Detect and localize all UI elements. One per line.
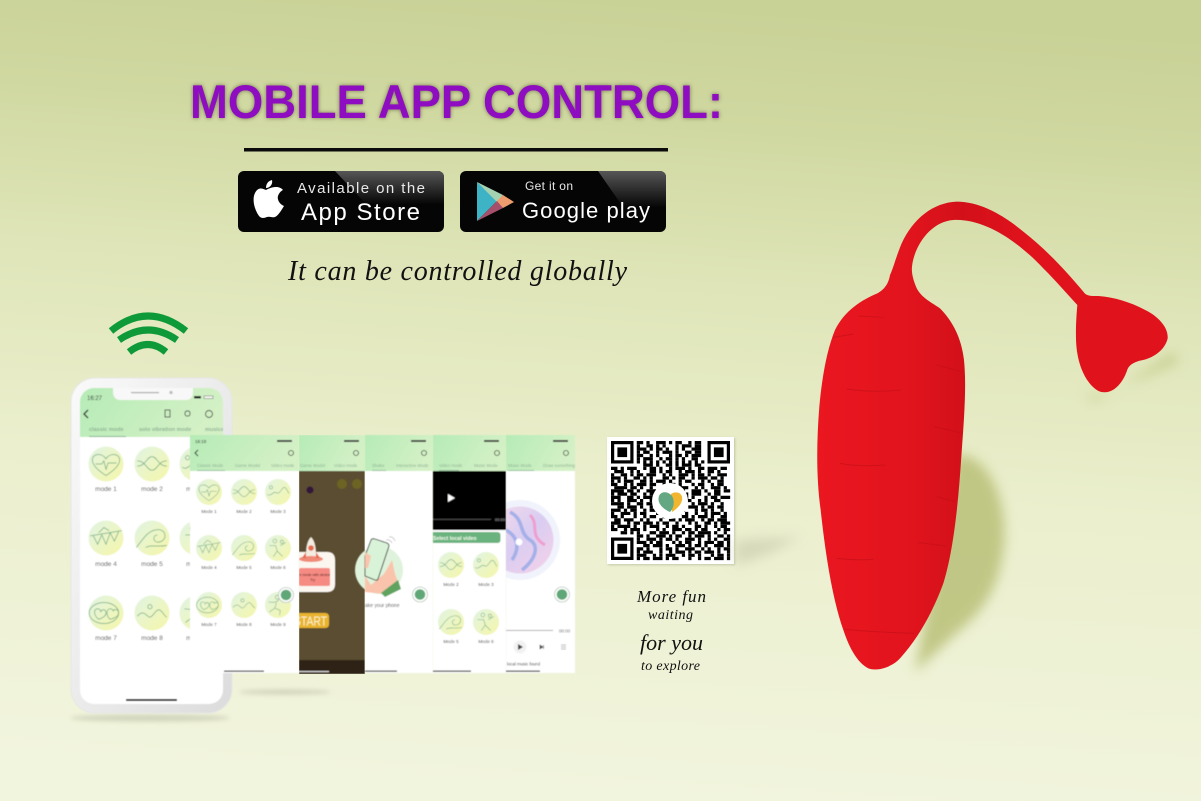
- video player: 00:00: [495, 517, 506, 522]
- title: MOBILE APP CONTROL:: [190, 75, 723, 128]
- screenshot mode grid: Mode 1: [201, 509, 217, 514]
- record button: [412, 587, 428, 602]
- phone tab: classic mode: classic mode: [89, 427, 124, 433]
- video mode grid: Mode 5: [443, 639, 459, 644]
- screenshot: shake mode: Interactive Mode: [396, 463, 429, 468]
- floor shadow beside QR: [736, 537, 800, 566]
- product shadows: [915, 352, 1180, 672]
- home bar: [433, 670, 471, 672]
- phone mode grid: mode 5: [141, 561, 163, 568]
- video tabs: Video mode: [439, 463, 463, 468]
- home bar: [224, 670, 264, 672]
- screenshot mode grid: Mode 9: [270, 622, 286, 627]
- game popup: [299, 552, 335, 592]
- phone tab underline: [89, 436, 126, 437]
- screenshot: game mode: [294, 435, 365, 674]
- music status: [553, 440, 568, 456]
- player controls: [514, 640, 566, 654]
- game floor: [299, 660, 365, 674]
- App Store small label: Available on the: [297, 180, 425, 197]
- progress bar: [506, 629, 553, 632]
- screenshot status: 16:18: [195, 439, 207, 444]
- game tabs: Game Model: [300, 463, 325, 468]
- Google play large label: Google play: [522, 198, 650, 223]
- game message: Try: [310, 578, 315, 582]
- phone mode grid: [88, 446, 190, 640]
- Google play small label: Get it on: [525, 179, 573, 193]
- phone back arrow: [84, 410, 88, 418]
- tagline: It can be controlled globally: [287, 256, 628, 287]
- select video button: [433, 532, 500, 543]
- phone speaker: [131, 391, 173, 394]
- phone tab: solo vibration mode: solo vibration mode: [139, 427, 191, 433]
- screenshot: classic modes: Video mode: [271, 463, 295, 468]
- screenshot mode grid: Mode 3: [270, 509, 286, 514]
- game dots: [306, 479, 362, 494]
- screenshot mode grid: Mode 7: [201, 622, 217, 627]
- phone mode grid: mode 8: [141, 635, 163, 642]
- phone status icons: [194, 396, 213, 398]
- illustration: phone in hand: [355, 537, 403, 597]
- phone mode grid: mode 9: [186, 635, 208, 642]
- screenshot tabs: Classic Mode: [197, 463, 224, 468]
- phone action icons: [165, 410, 212, 418]
- App Store large label: App Store: [301, 199, 420, 226]
- shake tabs: Shake: [372, 463, 385, 468]
- product: red carrot vibrator: [817, 202, 1168, 669]
- phone mode grid: mode 1: [95, 486, 117, 493]
- icon: wifi: [111, 316, 186, 352]
- screenshot mode grid: Mode 6: [270, 565, 286, 570]
- home bar: [365, 670, 397, 672]
- rocket: [299, 537, 323, 562]
- screenshot mode grid: Mode 4: [201, 565, 217, 570]
- video status: [484, 440, 500, 456]
- video mode grid: Mode 6: [478, 639, 494, 644]
- record button: [554, 587, 570, 602]
- shake caption: ake your phone: [365, 603, 400, 609]
- screenshot: video mode: Music Mode: [474, 463, 498, 468]
- screenshot: shake mode: [355, 435, 433, 673]
- QR finder: top left: [611, 441, 634, 464]
- badge: Google play: [460, 171, 666, 232]
- QR finder: top right: [708, 441, 730, 464]
- screenshot: music mode: [505, 434, 576, 674]
- time: 00:00: [559, 628, 571, 634]
- video mode grid: Mode 2: [443, 582, 459, 587]
- QR logo: [652, 483, 688, 519]
- game message: e mode with device: [300, 573, 330, 577]
- badge: App Store: [238, 171, 444, 232]
- phone notch: [113, 386, 193, 400]
- phone mode grid: mode 2: [141, 486, 163, 493]
- phone header: [80, 388, 223, 437]
- screenshot: game mode: Video mode: [334, 463, 358, 468]
- home bar: [506, 670, 540, 672]
- phone mode grid: mode 7: [95, 635, 117, 642]
- game status: [344, 440, 359, 456]
- screenshot: music mode: Draw something: [543, 463, 576, 468]
- start button: START: [294, 614, 327, 628]
- caption: More fun: More fun: [636, 587, 706, 606]
- QR code: [607, 437, 734, 564]
- floor shadows under phones: [70, 690, 331, 722]
- icon: apple: [254, 180, 284, 218]
- record button: [278, 588, 294, 602]
- phone home bar: [126, 699, 177, 701]
- screenshot: classic modes: [190, 435, 299, 673]
- video player: [433, 471, 506, 530]
- caption: waiting: waiting: [648, 608, 693, 623]
- screenshot mode grid: Mode 5: [236, 565, 252, 570]
- screenshot: video mode: [433, 435, 506, 673]
- screenshot: classic modes: Game Model: [235, 463, 260, 468]
- caption: for you: for you: [640, 630, 703, 655]
- shake status: [411, 440, 426, 456]
- divider under title: [244, 148, 668, 152]
- phone tab: music: musica: [205, 427, 225, 433]
- caption: to explore: to explore: [641, 659, 700, 674]
- icon: play triangle: [477, 182, 514, 221]
- game message: [299, 568, 330, 586]
- phone mockup: [71, 378, 232, 713]
- select video button: Select local video: [433, 536, 477, 542]
- music tabs: Music Mode: [508, 463, 532, 468]
- phone mode grid: mode 3: [186, 486, 208, 493]
- product silhouette: [817, 202, 1168, 669]
- product ridges: [833, 316, 962, 633]
- music status message: local music found: [507, 662, 541, 666]
- music disc: [506, 500, 560, 580]
- phone status time: 16:27: [87, 396, 103, 402]
- screenshot mode grid: Mode 2: [236, 509, 252, 514]
- phone mode grid: mode 4: [95, 561, 117, 568]
- screenshot mode grid: Mode 8: [236, 622, 252, 627]
- QR finder: bottom left: [611, 538, 634, 560]
- screenshot mode grid: [196, 479, 291, 627]
- video mode grid: Mode 3: [478, 582, 494, 587]
- phone mode grid: mode 6: [186, 561, 208, 568]
- video mode grid: [438, 552, 499, 644]
